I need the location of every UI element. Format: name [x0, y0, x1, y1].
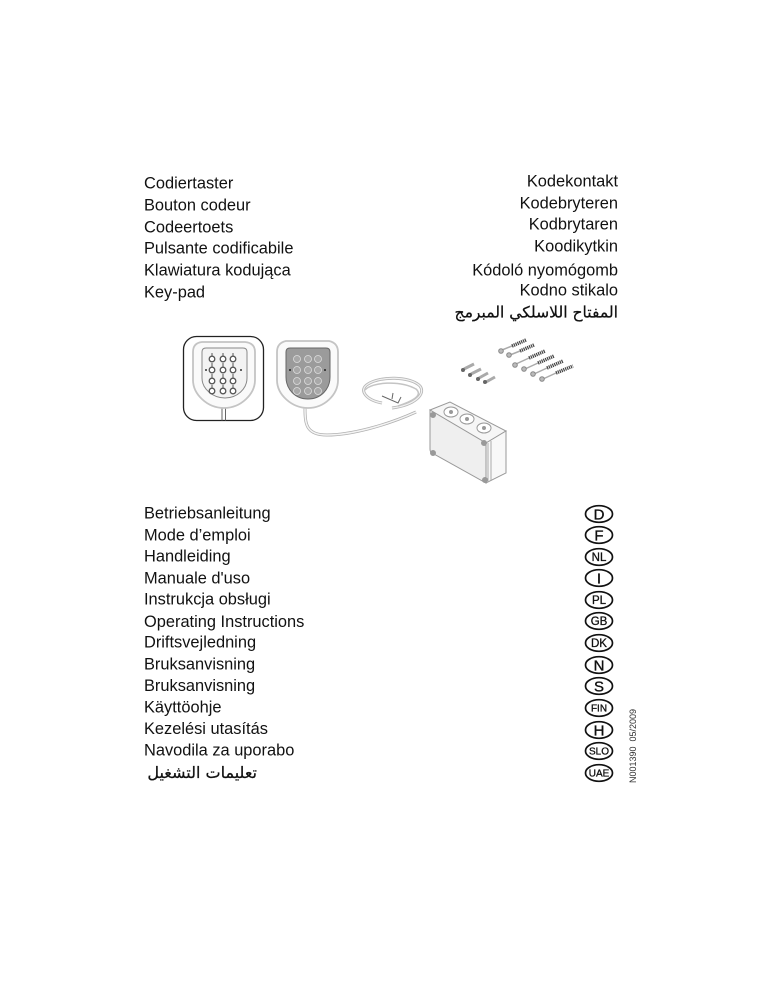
manual titles: language list: تعليمات التشغيل: [147, 763, 257, 782]
illustration: junction box: [430, 402, 506, 483]
manual titles: language list: [144, 504, 304, 782]
language badges: DK: [591, 638, 607, 650]
product names: right column: Kodbrytaren: [529, 216, 618, 234]
product names: right column: Kodebryteren: [520, 194, 618, 212]
product names: left column: [144, 174, 293, 302]
language badges: I: [597, 570, 601, 588]
language badges: [586, 506, 612, 781]
product names: left column: Pulsante codificabile: [144, 240, 293, 258]
manual titles: language list: Manuale d'uso: [144, 570, 250, 588]
manual titles: language list: Navodila za uporabo: [144, 742, 294, 760]
product names: left column: Codeertoets: [144, 218, 233, 236]
language badges: D: [594, 506, 605, 524]
manual titles: language list: Operating Instructions: [144, 613, 304, 631]
language badges: F: [594, 528, 604, 544]
language badges: N: [594, 658, 604, 674]
product names: left column: Codiertaster: [144, 174, 234, 192]
manual titles: language list: Käyttöohje: [144, 698, 221, 716]
manual titles: language list: Bruksanvisning: [144, 677, 255, 695]
language badges: PL: [592, 595, 607, 607]
product names: right column: Kodekontakt: [527, 172, 618, 190]
language badges: GB: [591, 616, 608, 628]
manual titles: language list: Kezelési utasítás: [144, 720, 268, 738]
manual titles: language list: Mode d’emploi: [144, 526, 251, 544]
document number, rotated: N001390 05/2009: [628, 709, 638, 783]
manual titles: language list: Betriebsanleitung: [144, 504, 271, 522]
language badges: SLO: [589, 746, 609, 758]
language badges: H: [594, 722, 604, 740]
language badges: FIN: [591, 704, 607, 714]
product names: right column: Koodikytkin: [534, 238, 618, 256]
manual titles: language list: Bruksanvisning: [144, 656, 255, 674]
product names: right column: Kódoló nyomógomb: [472, 262, 618, 280]
illustration: keypad with cable: [277, 341, 422, 435]
product names: left column: Klawiatura kodująca: [144, 262, 292, 280]
product names: right column: المفتاح اللاسلكي المبرمج: [455, 304, 618, 322]
manual titles: language list: Driftsvejledning: [144, 634, 256, 652]
product names: right column: Kodno stikalo: [520, 282, 618, 300]
language badges: UAE: [589, 768, 610, 780]
manual titles: language list: Handleiding: [144, 548, 231, 566]
illustration: screws and wall plugs: [461, 340, 573, 384]
product names: right column: [455, 172, 618, 322]
language badges: NL: [592, 552, 607, 564]
product names: left column: Key-pad: [144, 284, 205, 302]
language badges: S: [594, 678, 604, 696]
product names: left column: Bouton codeur: [144, 196, 251, 214]
illustration: wall-mounted keypad back: [184, 336, 264, 420]
manual titles: language list: Instrukcja obsługi: [144, 590, 271, 608]
